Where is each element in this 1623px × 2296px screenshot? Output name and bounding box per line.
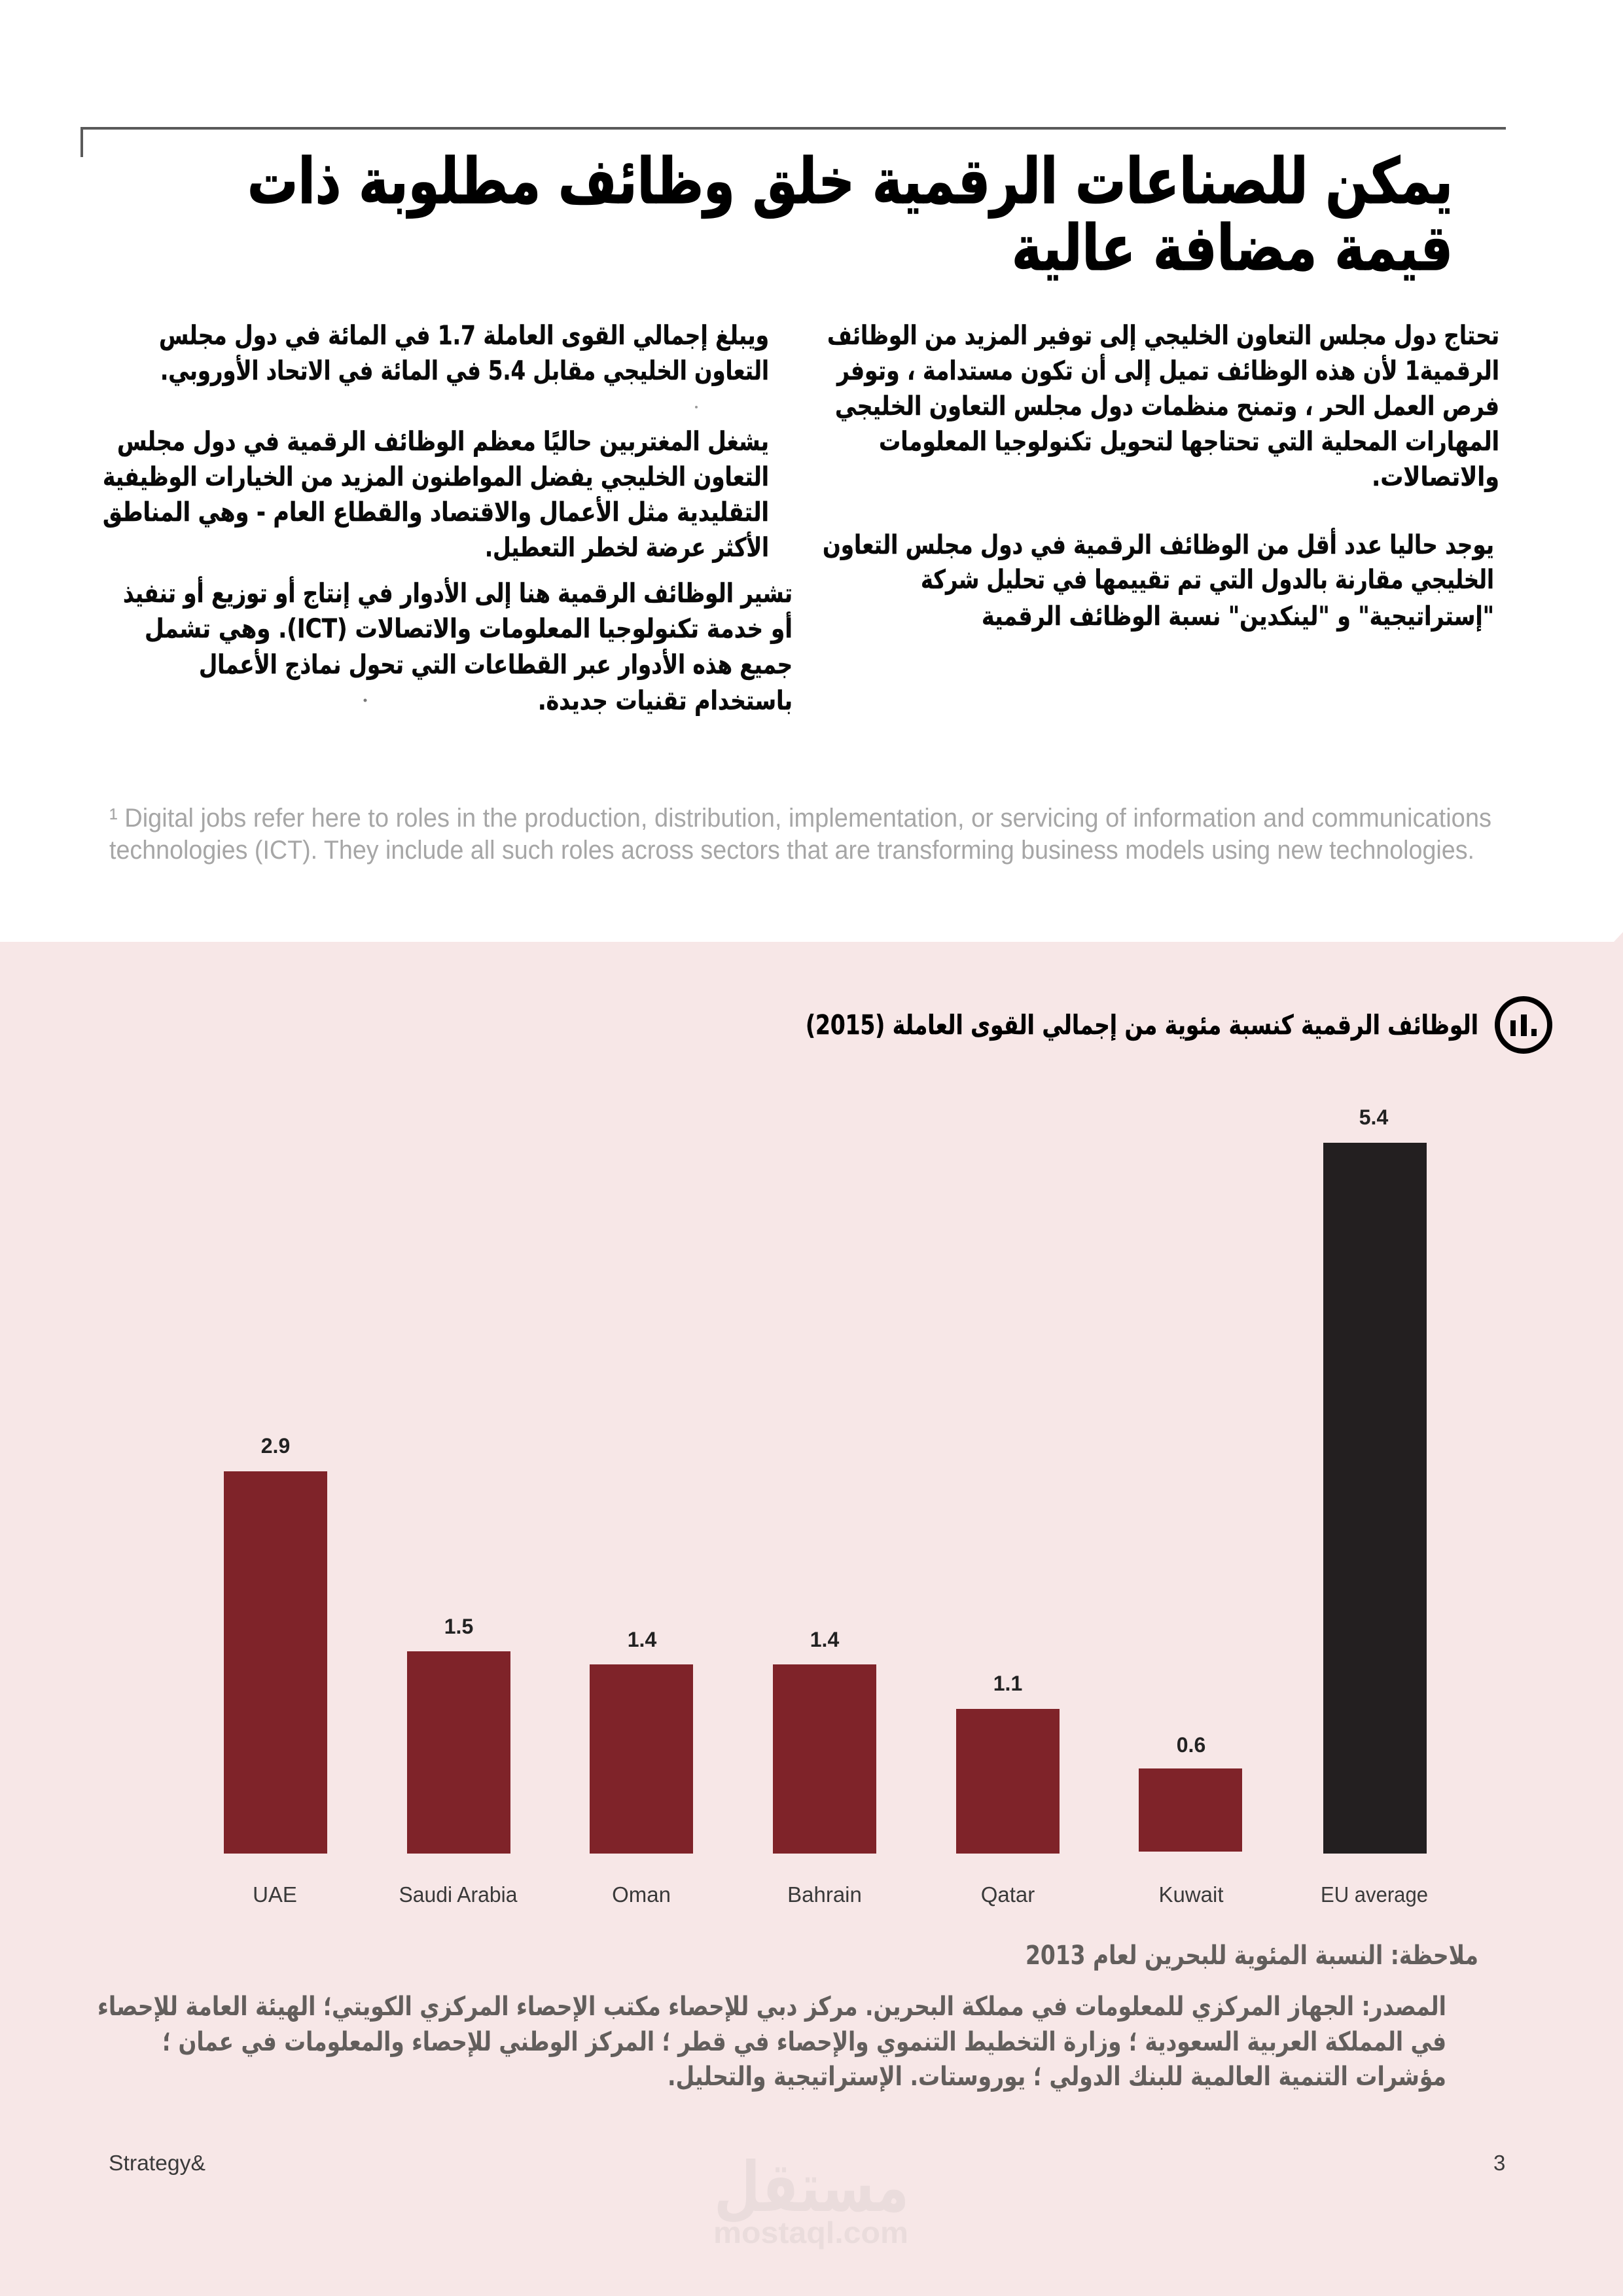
source text: مؤشرات التنمية العالمية للبنك الدولي ؛ يوروستات. الإستراتيجية والتحليل. xyxy=(668,2062,1446,2092)
bar: UAE xyxy=(224,1434,327,1907)
top corner rule xyxy=(82,128,1506,157)
footnote xyxy=(109,804,1491,865)
bar: Bahrain: Bahrain xyxy=(787,1882,862,1907)
chart heading: الوظائف الرقمية كنسبة مئوية من إجمالي القوى العاملة (2015) xyxy=(806,1009,1478,1041)
bar: EU average xyxy=(1321,1105,1428,1907)
bar: UAE: 2.9 xyxy=(261,1434,290,1458)
text block: left column second paragraph xyxy=(103,427,769,563)
text block: left column second paragraph: يشغل المغتربين حاليًا معظم الوظائف الرقمية في دول مجلس xyxy=(117,427,769,457)
text block: right column first paragraph: المهارات المحلية التي تحتاجها لتحويل تكنولوجيا المعلومات xyxy=(879,427,1499,457)
bar: UAE: UAE xyxy=(253,1882,297,1907)
page number: 3 xyxy=(1493,2151,1505,2175)
title: قيمة مضافة عالية xyxy=(1012,211,1453,285)
bar: Saudi Arabia: 1.5 xyxy=(444,1615,473,1638)
bar: Kuwait: 0.6 xyxy=(1177,1733,1205,1757)
bar: Saudi Arabia: Saudi Arabia xyxy=(399,1882,518,1907)
bar: EU average: 5.4 xyxy=(1359,1105,1388,1129)
text block: left column first paragraph: ويبلغ إجمالي القوى العاملة 1.7 في المائة في دول مجلس xyxy=(159,321,769,351)
bar: Qatar xyxy=(956,1672,1060,1907)
text block: left column third paragraph: جميع هذه الأدوار عبر القطاعات التي تحول نماذج الأعمال xyxy=(199,648,793,680)
text block: right column first paragraph: فرص العمل الحر ، وتمنح منظمات دول مجلس التعاون الخليجي xyxy=(835,391,1499,422)
source text xyxy=(98,1992,1446,2092)
text block: left column third paragraph xyxy=(123,576,793,716)
text block: right column second paragraph: "إستراتيجية" و "لينكدين" نسبة الوظائف الرقمية xyxy=(982,601,1494,632)
bar chart xyxy=(224,1105,1428,1907)
text block: left column first paragraph: التعاون الخليجي مقابل 5.4 في المائة في الاتحاد الأوروبي. xyxy=(160,354,769,386)
icon: bar chart in circle xyxy=(1497,999,1550,1051)
note: ملاحظة: النسبة المئوية للبحرين لعام 2013 xyxy=(1026,1941,1478,1971)
footnote: ¹ Digital jobs refer here to roles in the production, distribution, implementation, or servicing of information and communications xyxy=(109,804,1491,833)
bar: Oman: 1.4 xyxy=(628,1628,656,1651)
speck xyxy=(364,699,366,702)
text block: right column second paragraph: الخليجي مقارنة بالدول التي تم تقييمها في تحليل شركة xyxy=(921,565,1494,595)
text block: left column third paragraph: تشير الوظائف الرقمية هنا إلى الأدوار في إنتاج أو توزيع أو تنفيذ xyxy=(123,576,793,609)
text block: right column first paragraph: الرقمية1 لأن هذه الوظائف تميل إلى أن تكون مستدامة ، وتوفر xyxy=(836,353,1499,386)
bar: Kuwait xyxy=(1139,1733,1242,1907)
title xyxy=(247,145,1453,285)
bar: Bahrain: 1.4 xyxy=(810,1628,839,1651)
bar: Oman xyxy=(590,1628,693,1907)
text block: right column second paragraph: يوجد حاليا عدد أقل من الوظائف الرقمية في دول مجلس التعاون xyxy=(823,528,1494,560)
bar: Saudi Arabia xyxy=(399,1615,518,1907)
bar: Bahrain xyxy=(773,1628,876,1907)
text block: right column first paragraph xyxy=(827,321,1499,492)
text block: right column second paragraph xyxy=(823,528,1494,632)
bar: EU average: EU average xyxy=(1321,1882,1428,1907)
bar: Qatar: 1.1 xyxy=(993,1672,1022,1695)
footer brand: Strategy& xyxy=(109,2151,205,2175)
text block: left column third paragraph: باستخدام تقنيات جديدة. xyxy=(538,686,793,716)
watermark: mostaql.com xyxy=(713,2215,908,2250)
watermark xyxy=(713,2147,909,2250)
text block: left column first paragraph xyxy=(159,321,769,386)
bar: Kuwait: Kuwait xyxy=(1158,1882,1224,1907)
text block: left column third paragraph: أو خدمة تكنولوجيا المعلومات والاتصالات (ICT). وهي تشمل xyxy=(145,611,793,644)
text block: left column second paragraph: التقليدية مثل الأعمال والاقتصاد والقطاع العام - وهي المناطق xyxy=(103,495,769,528)
text block: right column first paragraph: والاتصالات. xyxy=(1372,462,1499,492)
footnote: technologies (ICT). They include all such roles across sectors that are transforming business models using new technologies. xyxy=(109,836,1474,865)
bar: Qatar: Qatar xyxy=(981,1882,1035,1907)
watermark: مستقل xyxy=(714,2147,909,2227)
text block: left column second paragraph: الأكثر عرضة لخطر التعطيل. xyxy=(485,531,769,563)
text block: left column second paragraph: التعاون الخليجي يفضل المواطنون المزيد من الخيارات الوظيفية xyxy=(103,462,769,492)
panel: pink chart background xyxy=(0,932,1623,2296)
bar: Oman: Oman xyxy=(612,1882,671,1907)
speck xyxy=(695,406,698,408)
